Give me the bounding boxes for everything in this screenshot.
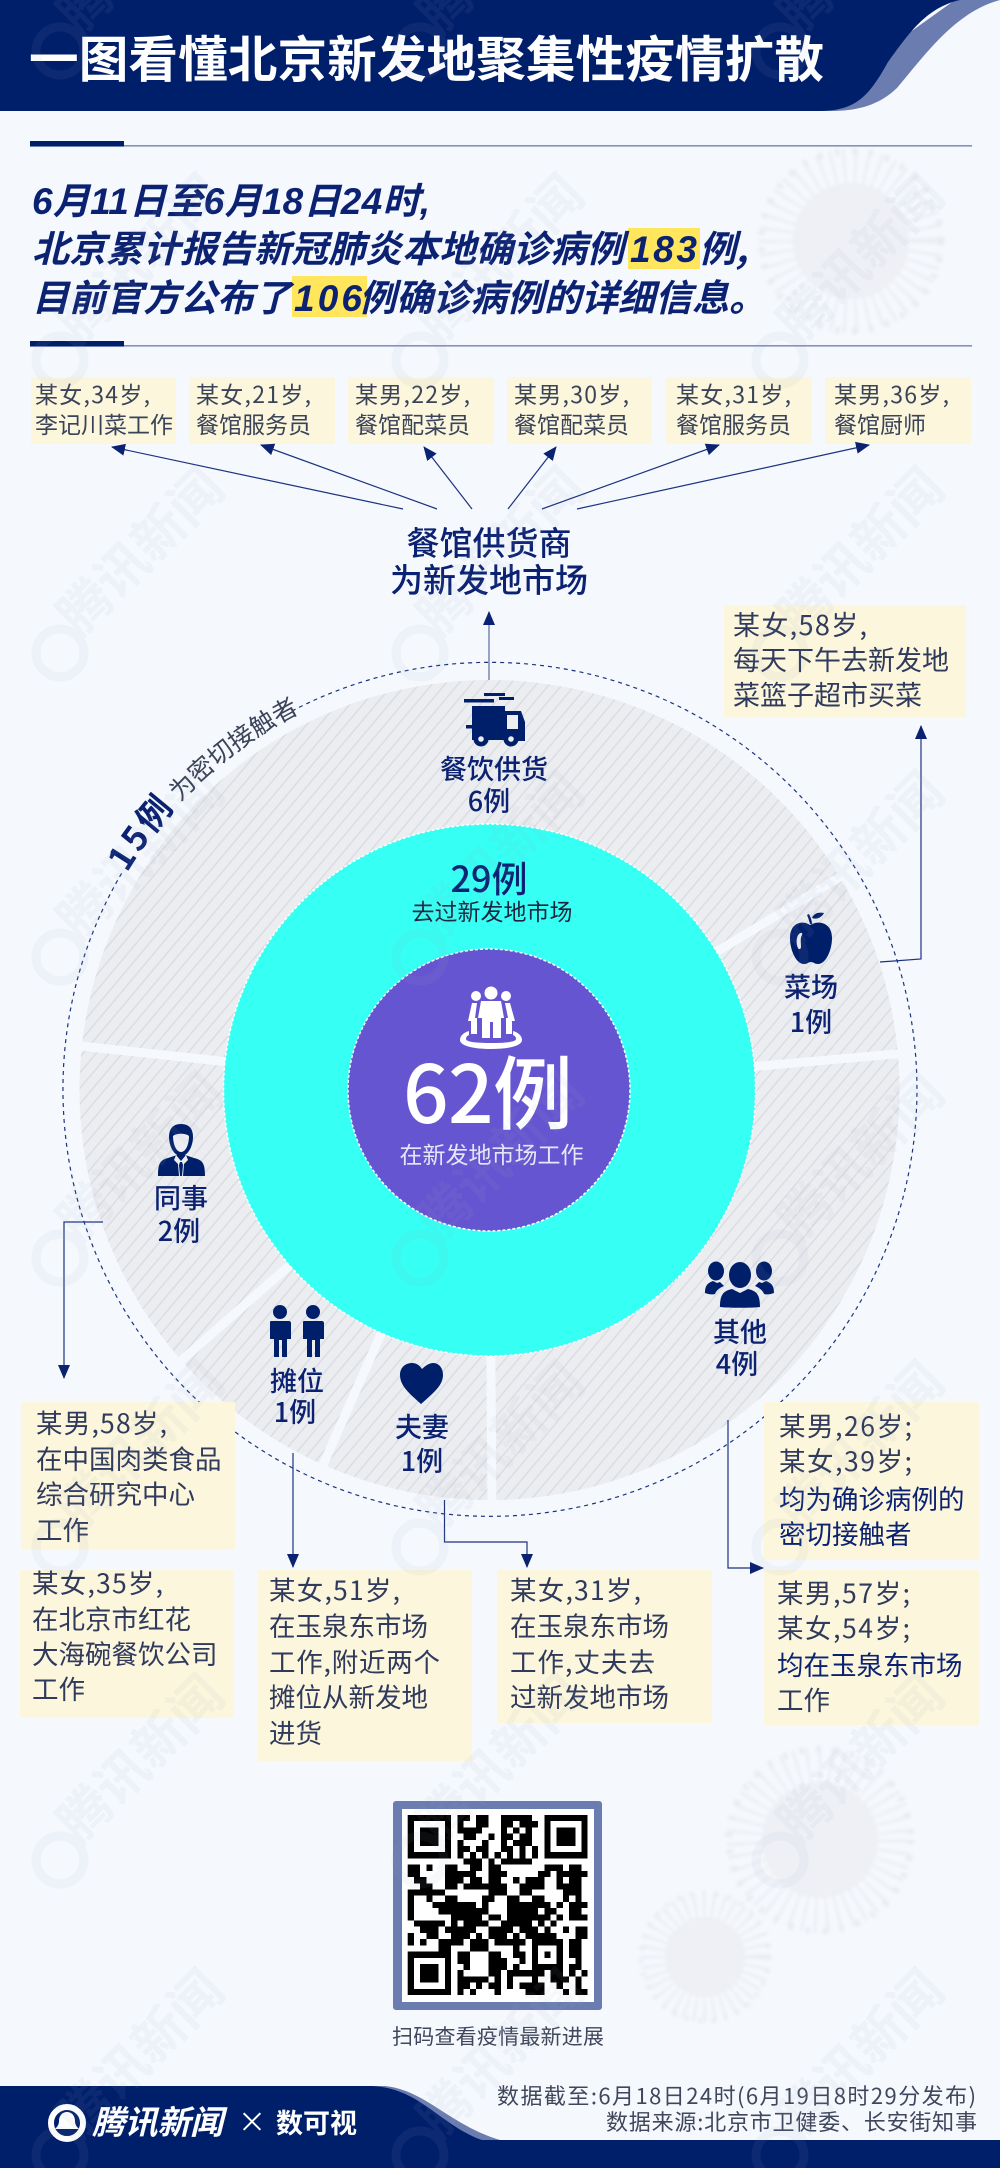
watermark overlay: 腾讯新闻 bbox=[758, 155, 958, 356]
arrows: supplier to staff bbox=[112, 445, 869, 509]
icon: group of people bbox=[460, 986, 522, 1049]
case box: colleague 35: 工作 bbox=[32, 1668, 85, 1707]
segment: stall: 摊位 bbox=[270, 1360, 324, 1399]
arrow: others to cases bbox=[728, 1420, 763, 1568]
outer dashed ring bbox=[63, 662, 917, 1516]
case box 6 bbox=[825, 376, 971, 444]
watermark overlay: 腾讯新闻 bbox=[38, 1053, 238, 1254]
case box: couple 31: 工作,丈夫去 bbox=[510, 1641, 655, 1680]
case box: stall 51: 某女,51岁, bbox=[269, 1569, 400, 1608]
case box 2: 某女,21岁, bbox=[196, 376, 311, 410]
case box: colleague 58: 综合研究中心 bbox=[36, 1473, 195, 1512]
watermark overlay: 腾讯新闻 bbox=[398, 1053, 598, 1254]
summary text: 106 bbox=[294, 278, 362, 319]
segment: stall: 1例 bbox=[274, 1391, 316, 1430]
case box: others 57 54: 均在玉泉东市场 bbox=[777, 1644, 962, 1683]
decoration: virus lower large bbox=[729, 1749, 911, 1931]
supplier label bbox=[390, 517, 588, 602]
summary text bbox=[32, 181, 766, 322]
case box: others 57 54: 某男,57岁; bbox=[777, 1572, 910, 1611]
arrow: stall to case bbox=[292, 1453, 294, 1567]
arrow: catering up to supplier bbox=[488, 612, 490, 680]
case box 5 bbox=[666, 376, 812, 444]
segment: colleagues bbox=[154, 1124, 208, 1249]
case boxes: restaurant staff bbox=[31, 376, 971, 444]
segment: others bbox=[705, 1262, 774, 1382]
footer logo: data view: 数可视 bbox=[276, 2102, 357, 2141]
watermark overlay: 腾讯新闻 bbox=[758, 448, 958, 649]
watermark overlay: 腾讯新闻 bbox=[758, 1655, 958, 1856]
case box: others 26 39: 均为确诊病例的 bbox=[779, 1478, 964, 1517]
case box 4 bbox=[507, 376, 652, 444]
segment: vegetable market: 1例 bbox=[790, 1001, 832, 1040]
case box: colleague 58: 某男,58岁, bbox=[36, 1402, 167, 1441]
case box 3 bbox=[348, 376, 494, 444]
segment: couple: 夫妻 bbox=[395, 1406, 449, 1445]
case box: colleague 58: 在中国肉类食品 bbox=[36, 1438, 222, 1477]
case box 1: 某女,34岁, bbox=[35, 376, 150, 410]
case box 2: 餐馆服务员 bbox=[196, 406, 311, 440]
case box: colleague 35: 在北京市红花 bbox=[32, 1598, 191, 1637]
case box: couple 31: 某女,31岁, bbox=[510, 1569, 641, 1608]
case box: stall 51 bbox=[258, 1569, 472, 1761]
icon: person in suit bbox=[158, 1124, 205, 1176]
summary text: 例确诊病例的详细信息。 bbox=[359, 268, 766, 322]
segment: colleagues: 2例 bbox=[158, 1210, 200, 1249]
watermark overlay: 腾讯新闻 bbox=[398, 155, 598, 356]
case box: stall 51: 工作,附近两个 bbox=[269, 1641, 440, 1680]
watermark overlay: 腾讯新闻 bbox=[398, 1342, 598, 1543]
header banner bbox=[0, 0, 1000, 111]
case box: couple 31: 过新发地市场 bbox=[510, 1676, 669, 1715]
decoration: virus top right bbox=[761, 151, 941, 331]
segment: catering supply: 餐饮供货 bbox=[440, 748, 548, 787]
case box: stall 51: 摊位从新发地 bbox=[269, 1676, 428, 1715]
summary text: 6月11日至6月18日24时, bbox=[32, 181, 430, 222]
case box 6: 餐馆厨师 bbox=[834, 406, 926, 440]
title: 一图看懂北京新发地聚集性疫情扩散 bbox=[29, 20, 824, 92]
rule bottom bbox=[30, 341, 972, 347]
watermark overlay: 腾讯新闻 bbox=[398, 752, 598, 953]
case box: colleague 35 bbox=[20, 1562, 234, 1718]
case box: vegetable market bbox=[724, 604, 966, 717]
decoration: virus lower small bbox=[641, 1893, 769, 2021]
case box 6: 某男,36岁, bbox=[834, 376, 949, 410]
case box: colleague 35: 某女,35岁, bbox=[32, 1562, 163, 1601]
segment: catering supply bbox=[440, 693, 548, 819]
cyan ring: 29 cases: 去过新发地市场 bbox=[412, 893, 572, 927]
icon: apple bbox=[790, 913, 832, 964]
segment: stall bbox=[270, 1305, 324, 1430]
case box: others 26 39 bbox=[764, 1402, 979, 1560]
watermark overlay: 腾讯新闻 bbox=[38, 155, 238, 356]
footer banner bbox=[0, 2086, 1000, 2168]
case box 2 bbox=[189, 376, 335, 444]
ring label: close contacts: 15例 为密切接触者 bbox=[109, 696, 297, 871]
case box: others 26 39: 某女,39岁; bbox=[779, 1440, 912, 1479]
rule top bbox=[30, 141, 972, 147]
watermark overlay: 腾讯新闻 bbox=[758, 1342, 958, 1543]
summary text: 目前官方公布了 bbox=[32, 268, 295, 322]
segment: couple: 1例 bbox=[401, 1440, 443, 1479]
case box: couple 31: 在玉泉东市场 bbox=[510, 1605, 669, 1644]
segment: others: 其他 bbox=[713, 1311, 767, 1350]
case box: others 57 54: 工作 bbox=[777, 1679, 830, 1718]
segment: couple bbox=[395, 1363, 449, 1479]
watermark overlay: 腾讯新闻 bbox=[38, 1655, 238, 1856]
case box: stall 51: 在玉泉东市场 bbox=[269, 1605, 428, 1644]
case box 4: 某男,30岁, bbox=[514, 376, 629, 410]
case box: colleague 58 bbox=[21, 1402, 235, 1550]
footer data cutoff: 数据截至:6月18日24时(6月19日8时29分发布) bbox=[497, 2079, 976, 2111]
summary text: 北京累计报告新冠肺炎本地确诊病例 bbox=[32, 219, 630, 273]
purple core: 62 cases bbox=[348, 949, 630, 1231]
watermark overlay: 腾讯新闻 bbox=[38, 1950, 238, 2151]
segment: vegetable market: 菜场 bbox=[784, 966, 838, 1005]
arrow: colleagues to cases bbox=[64, 1222, 103, 1378]
watermark overlay: 腾讯新闻 bbox=[758, 1053, 958, 1254]
QR code bbox=[393, 1801, 602, 2010]
icon: two people bbox=[270, 1305, 324, 1357]
supplier label: 为新发地市场 bbox=[390, 554, 588, 602]
footer data source: 数据来源:北京市卫健委、长安街知事 bbox=[606, 2105, 977, 2137]
icon: truck bbox=[464, 693, 525, 746]
case box: vegetable market: 每天下午去新发地 bbox=[733, 639, 949, 678]
case box: vegetable market: 菜篮子超市买菜 bbox=[733, 674, 922, 713]
summary text: 183 bbox=[630, 229, 697, 270]
contact ring bbox=[71, 680, 907, 1512]
case box: colleague 35: 大海碗餐饮公司 bbox=[32, 1633, 218, 1672]
segment: colleagues: 同事 bbox=[154, 1177, 208, 1216]
cyan ring: 29 cases: 29例 bbox=[450, 851, 528, 903]
purple core: 62 cases: 在新发地市场工作 bbox=[400, 1136, 584, 1170]
case box 1 bbox=[31, 376, 176, 444]
case box: others 57 54: 某女,54岁; bbox=[777, 1607, 910, 1646]
watermark overlay: 腾讯新闻 bbox=[38, 448, 238, 649]
case box: colleague 58: 工作 bbox=[36, 1509, 89, 1548]
icon: heart bbox=[400, 1363, 443, 1404]
segment: others: 4例 bbox=[716, 1343, 758, 1382]
cyan ring: 29 cases bbox=[224, 824, 756, 1356]
QR caption: 扫码查看疫情最新进展 bbox=[392, 2021, 604, 2051]
case box 5: 某女,31岁, bbox=[676, 376, 791, 410]
watermark overlay: 腾讯新闻 bbox=[758, 752, 958, 953]
case box 5: 餐馆服务员 bbox=[676, 406, 791, 440]
supplier label: 餐馆供货商 bbox=[406, 517, 572, 565]
case box: others 26 39: 某男,26岁; bbox=[779, 1405, 912, 1444]
case box 3: 餐馆配菜员 bbox=[355, 406, 470, 440]
case box: couple 31 bbox=[497, 1569, 712, 1723]
footer logo: Tencent News: 腾讯新闻 bbox=[92, 2096, 228, 2144]
case box: vegetable market: 某女,58岁, bbox=[733, 604, 867, 643]
segment: catering supply: 6例 bbox=[468, 780, 510, 819]
summary text: 例, bbox=[699, 219, 748, 273]
case box: others 26 39: 密切接触者 bbox=[779, 1513, 912, 1552]
footer cross: × bbox=[238, 2101, 266, 2141]
case box 3: 某男,22岁, bbox=[355, 376, 470, 410]
purple core: 62 cases: 62例 bbox=[403, 1031, 573, 1147]
segment: vegetable market bbox=[784, 913, 838, 1040]
watermark overlay: 腾讯新闻 bbox=[398, 1950, 598, 2151]
case box 4: 餐馆配菜员 bbox=[514, 406, 629, 440]
watermark overlay: 腾讯新闻 bbox=[758, 1950, 958, 2151]
icon: three people bbox=[705, 1262, 774, 1308]
case box 1: 李记川菜工作 bbox=[35, 406, 173, 440]
case box: others 57 54 bbox=[764, 1570, 979, 1725]
watermark overlay: 腾讯新闻 bbox=[38, 752, 238, 953]
arrow: couple to case bbox=[444, 1500, 527, 1567]
watermark overlay: 腾讯新闻 bbox=[398, 448, 598, 649]
case box: stall 51: 进货 bbox=[269, 1712, 322, 1751]
arrow: vegetable market to case bbox=[880, 726, 921, 962]
watermark overlay: 腾讯新闻 bbox=[398, 1655, 598, 1856]
watermark overlay: 腾讯新闻 bbox=[38, 1342, 238, 1543]
